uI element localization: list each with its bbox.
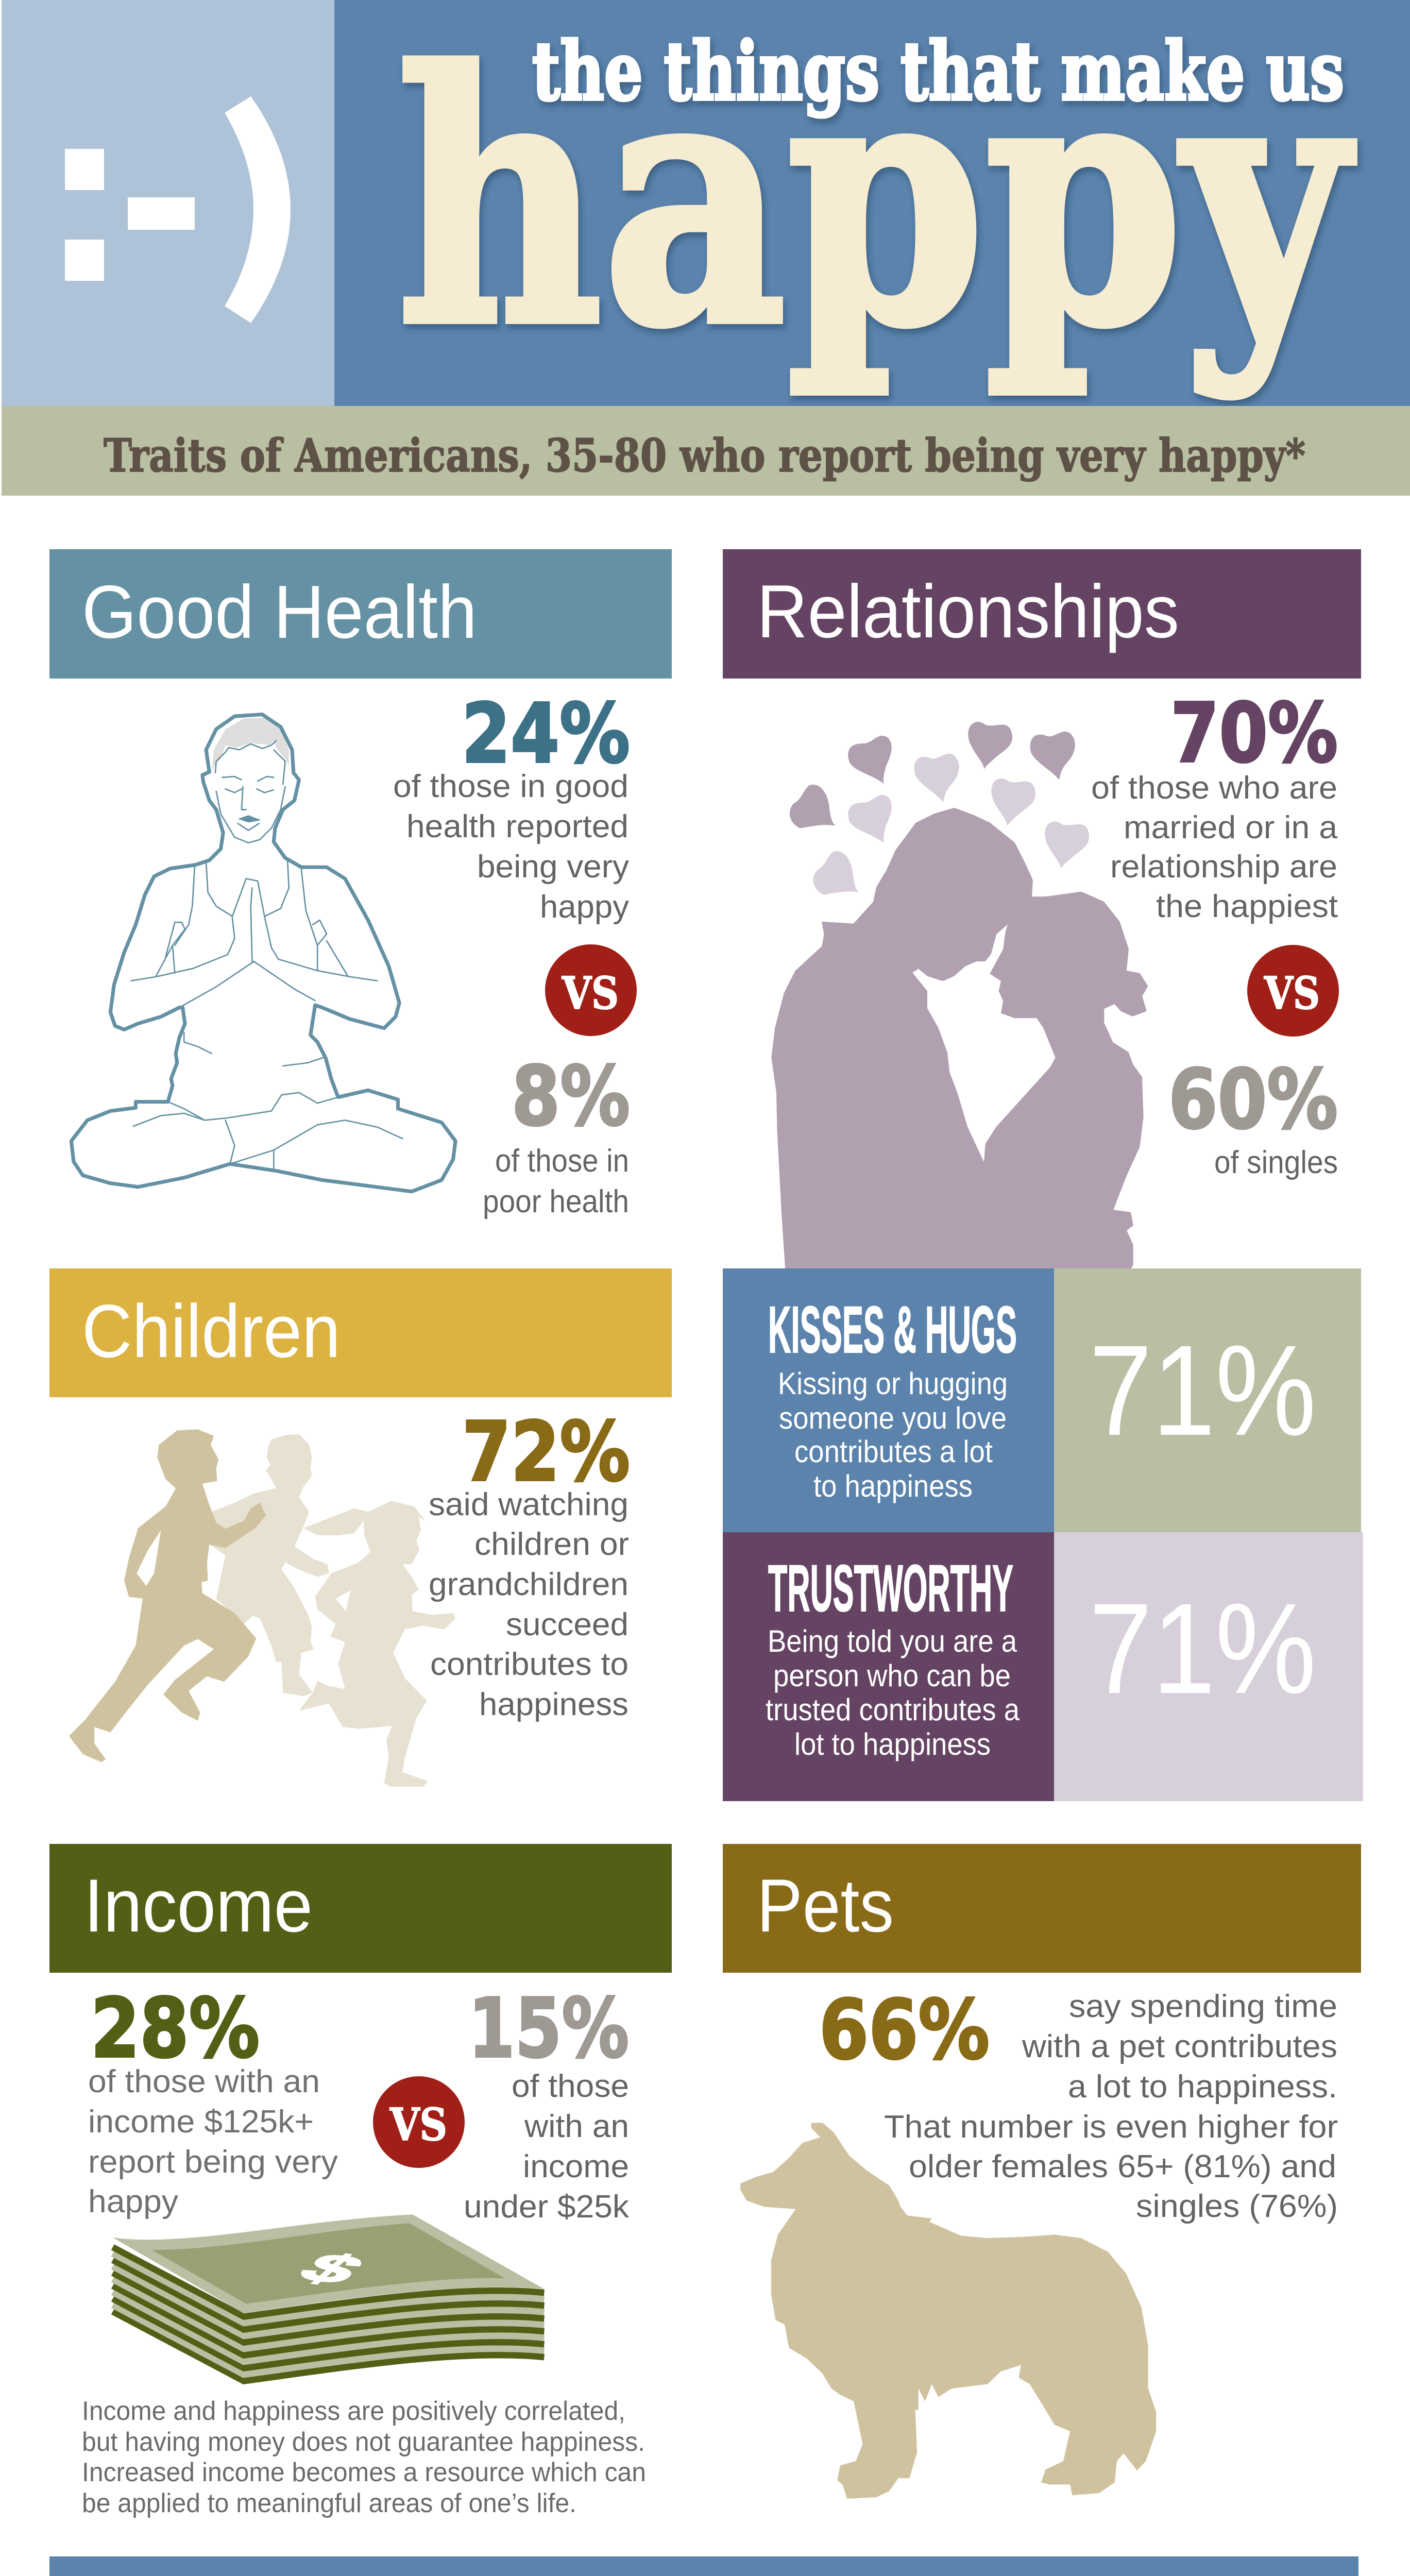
text: income note: be applied to meaningful areas of one’s life.	[82, 2488, 576, 2518]
text: income note: but having money does not guarantee happiness.	[82, 2427, 645, 2457]
stat: 24 percent good health: 24%	[462, 686, 630, 782]
text: pets description: older females 65+ (81%) and	[909, 2149, 1336, 2184]
stat: 70 percent in a relationship: of those who are	[1091, 770, 1337, 806]
stat: 15 percent low income: with an	[524, 2109, 629, 2144]
stat: 28 percent high income: income $125k+	[88, 2104, 314, 2140]
stat: 24 percent good health: of those in good	[393, 769, 628, 804]
stat: 28 percent high income: 28%	[91, 1981, 260, 2076]
text: pets description: with a pet contributes	[1022, 2029, 1337, 2064]
text: kissing description: someone you love	[779, 1401, 1007, 1435]
heading: pets	[723, 1844, 1361, 1973]
illustration: couple silhouette with hearts	[772, 722, 1147, 1268]
stat: 72 percent children: succeed	[506, 1607, 628, 1642]
stat: 71 percent kisses: 71%	[1089, 1318, 1316, 1462]
stat: 24 percent good health: happy	[540, 889, 629, 925]
stat: 15 percent low income	[464, 1981, 630, 2225]
stat: 24 percent good health	[393, 686, 630, 925]
panel: trustworthy: TRUSTWORTHY	[768, 1552, 1013, 1625]
text: kissing description: contributes a lot	[794, 1434, 993, 1469]
heading: pets: Pets	[757, 1863, 894, 1947]
panel: kisses and hugs	[723, 1268, 1361, 1532]
text: kissing description: Kissing or hugging	[778, 1366, 1008, 1401]
stat: 15 percent low income: under $25k	[464, 2189, 630, 2225]
badge: vs	[373, 2076, 465, 2168]
heading: when are people happiest	[49, 2556, 1358, 2576]
heading: children: Children	[82, 1289, 341, 1373]
heading: relationships: Relationships	[757, 569, 1179, 653]
text: kissing description	[778, 1366, 1008, 1503]
badge: vs	[545, 944, 637, 1036]
stat: 60 percent of singles: of singles	[1214, 1145, 1338, 1180]
stat: 15 percent low income: 15%	[468, 1981, 629, 2076]
text: income note: Increased income becomes a resource which can	[82, 2458, 646, 2487]
stat: 72 percent children	[429, 1404, 630, 1722]
stat: 72 percent children: grandchildren	[429, 1567, 628, 1602]
panel: income	[49, 1844, 672, 2518]
illustration: stack of money	[113, 2214, 544, 2381]
text: trustworthy description: trusted contributes a	[766, 1692, 1020, 1727]
heading: income	[49, 1844, 672, 1973]
stat: 70 percent in a relationship: relationship are	[1110, 849, 1337, 885]
heading: good health	[49, 549, 672, 679]
panel: pets	[723, 1844, 1361, 2499]
text: income note	[82, 2396, 646, 2518]
stat: 72 percent children: said watching	[429, 1487, 628, 1522]
heading: relationships	[723, 549, 1361, 679]
heading: children	[49, 1268, 672, 1397]
text: pets description: That number is even higher for	[884, 2109, 1338, 2145]
text: pets description: a lot to happiness.	[1068, 2069, 1337, 2105]
text: pets description: singles (76%)	[1136, 2189, 1338, 2224]
stat: 28 percent high income	[88, 1981, 338, 2219]
stat: 66 percent pets: 66%	[819, 1982, 990, 2078]
text: trustworthy description: lot to happiness	[794, 1727, 991, 1761]
text: pets description: say spending time	[1069, 1989, 1337, 2024]
stat: 28 percent high income: report being very	[88, 2144, 338, 2180]
badge: vs: VS	[1264, 968, 1320, 1020]
stat: 8 percent poor health: poor health	[483, 1184, 629, 1219]
illustration: dog silhouette	[740, 2123, 1156, 2499]
stat: 28 percent high income: of those with an	[88, 2064, 320, 2099]
stat: 60 percent of singles: 60%	[1168, 1052, 1338, 1147]
stat: 28 percent high income: happy	[88, 2184, 178, 2219]
panel: header banner	[2, 0, 1410, 406]
stat: 24 percent good health: health reported	[406, 809, 628, 844]
stat: 60 percent of singles	[1168, 1052, 1338, 1180]
panel: when are people happiest	[49, 2556, 1358, 2576]
panel: good health	[49, 549, 672, 1219]
panel: relationships	[723, 549, 1361, 1268]
illustration: stack of money: $	[285, 2245, 378, 2292]
panel: subtitle band	[2, 406, 1410, 496]
heading: good health: Good Health	[82, 570, 477, 654]
stat: 72 percent children: 72%	[462, 1404, 630, 1500]
stat: 70 percent in a relationship: 70%	[1170, 686, 1338, 781]
panel: trustworthy	[723, 1532, 1363, 1801]
stat: 24 percent good health: being very	[477, 849, 629, 885]
stat: 8 percent poor health	[483, 1049, 630, 1219]
badge: vs: VS	[562, 968, 619, 1020]
stat: 72 percent children: children or	[474, 1527, 629, 1562]
stat: 15 percent low income: of those	[512, 2069, 629, 2104]
panel: children	[49, 1268, 672, 1787]
text: kissing description: to happiness	[813, 1469, 973, 1503]
panel: kisses and hugs: KISSES & HUGS	[768, 1293, 1017, 1367]
stat: 70 percent in a relationship	[1091, 686, 1338, 924]
badge: vs: VS	[389, 2099, 447, 2151]
stat: 72 percent children: happiness	[479, 1687, 628, 1722]
text: income note: Income and happiness are positively correlated,	[82, 2396, 625, 2426]
stat: 71 percent trustworthy: 71%	[1089, 1577, 1316, 1720]
stat: 15 percent low income: income	[523, 2149, 629, 2184]
icon: text smiley	[65, 96, 291, 323]
stat: 70 percent in a relationship: the happiest	[1156, 889, 1338, 924]
text: trustworthy description: Being told you are a	[768, 1624, 1017, 1658]
heading: income: Income	[84, 1863, 313, 1947]
stat: 70 percent in a relationship: married or in a	[1124, 810, 1338, 845]
stat: 72 percent children: contributes to	[430, 1647, 628, 1682]
stat: 8 percent poor health: 8%	[512, 1049, 630, 1144]
illustration: running children silhouettes	[69, 1429, 455, 1787]
text: trustworthy description	[766, 1624, 1020, 1761]
stat: 8 percent poor health: of those in	[495, 1143, 629, 1179]
text: pets description	[884, 1989, 1338, 2224]
text: trustworthy description: person who can be	[773, 1658, 1011, 1693]
badge: vs	[1247, 945, 1339, 1037]
illustration: meditating figure	[71, 715, 455, 1192]
